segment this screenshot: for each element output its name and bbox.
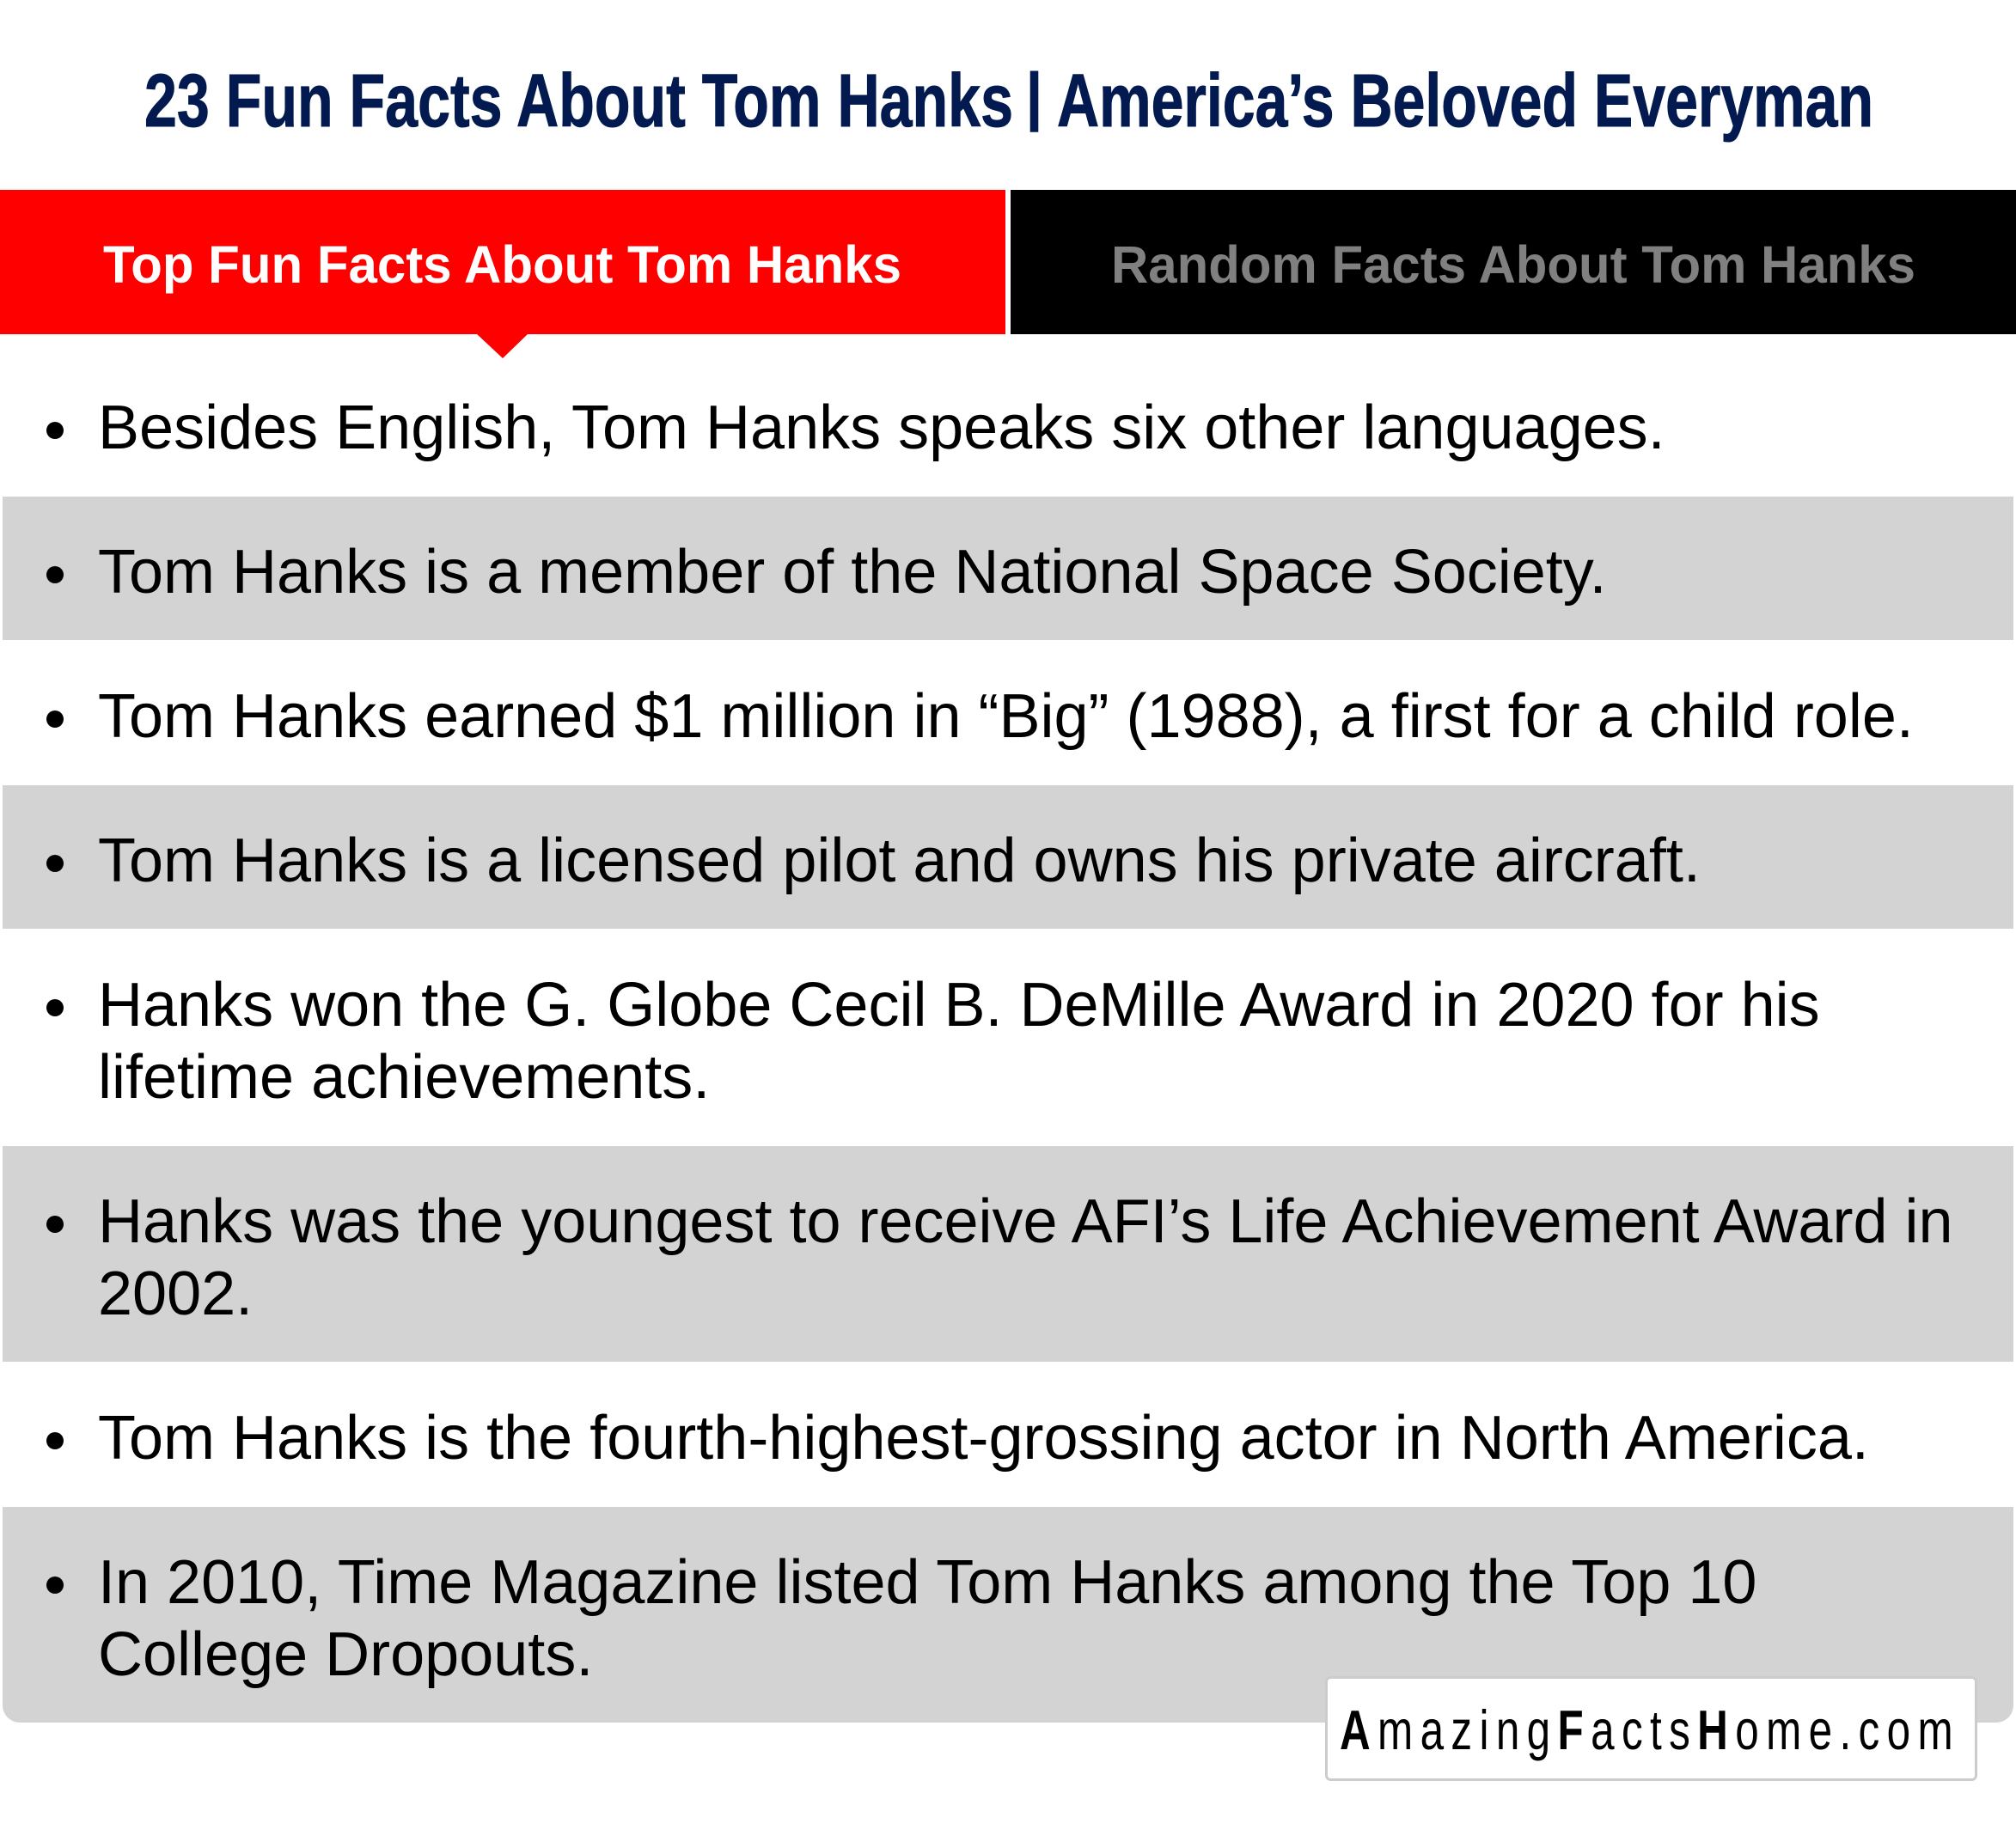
fact 2: Tom Hanks is a member of the National Space Society. [98, 538, 1606, 607]
tab label: random facts: Random Facts About Tom Hanks [1111, 235, 1915, 294]
fact list [3, 393, 2013, 1723]
tab pointer arrow [476, 333, 528, 358]
tab: top fun facts (active) [0, 190, 1005, 358]
fact 6: Hanks was the youngest to receive AFI’s Life Achievement Award in [98, 1187, 1953, 1256]
fact 3: Tom Hanks earned $1 million in “Big” (1988), a first for a child role. [98, 682, 1914, 751]
watermark text: AmazingFactsHome.com [1340, 1700, 1953, 1762]
tab: random facts (inactive) [1011, 190, 2016, 334]
fact 1: Besides English, Tom Hanks speaks six other languages. [98, 393, 1665, 462]
tab label: top fun facts: Top Fun Facts About Tom Hanks [103, 235, 901, 294]
fact 5: Hanks won the G. Globe Cecil B. DeMille Award in 2020 for his [98, 971, 1820, 1040]
fact 8 [3, 1507, 2013, 1723]
fact 8: In 2010, Time Magazine listed Tom Hanks among the Top 10 [98, 1548, 1756, 1617]
fact 6 [3, 1146, 2013, 1362]
fact 6: 2002. [98, 1259, 253, 1328]
fact 5 [46, 971, 1820, 1112]
title [144, 59, 1873, 143]
fact 8: College Dropouts. [98, 1620, 593, 1689]
fact 7: Tom Hanks is the fourth-highest-grossing actor in North America. [98, 1404, 1869, 1473]
fact 2 [3, 497, 2013, 640]
watermark badge [1327, 1677, 1976, 1780]
fact 4: Tom Hanks is a licensed pilot and owns his private aircraft. [98, 826, 1701, 895]
fact 4 [3, 785, 2013, 929]
title: 23 Fun Facts About Tom Hanks [144, 59, 1013, 143]
fact 5: lifetime achievements. [98, 1043, 710, 1112]
title: | [1025, 59, 1043, 132]
